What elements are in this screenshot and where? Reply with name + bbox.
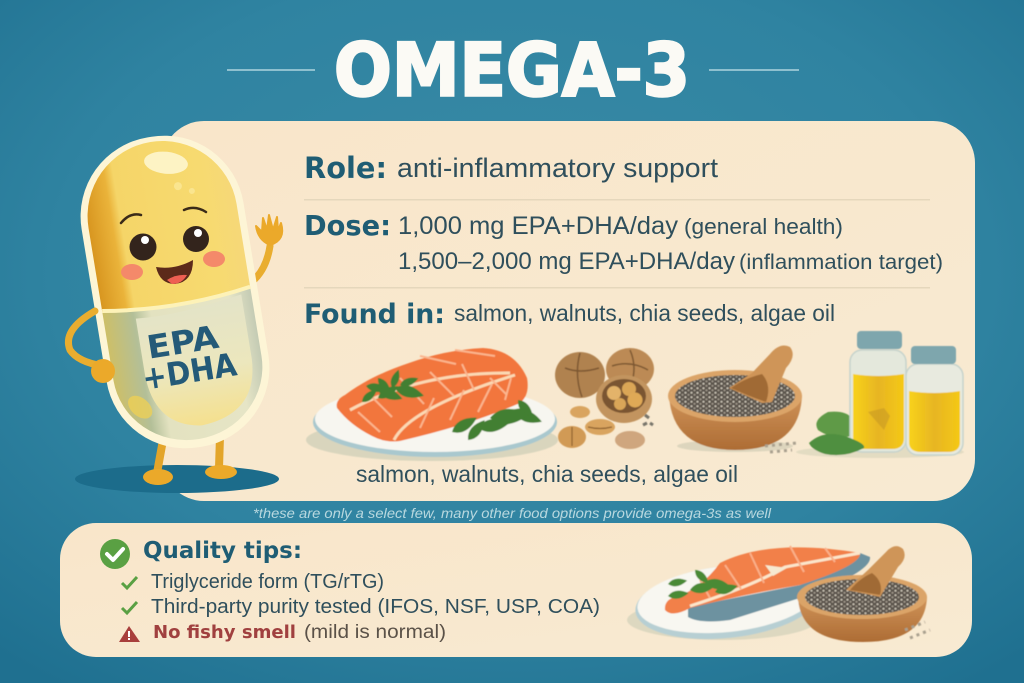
quality tips heading: Quality tips: <box>143 538 302 564</box>
found in row: Found in: <box>304 299 445 330</box>
dose row: (inflammation target) <box>739 251 943 274</box>
icon: chia seed bowl <box>668 346 802 452</box>
food caption: salmon, walnuts, chia seeds, algae oil <box>356 461 738 487</box>
role row: anti-inflammatory support <box>397 153 719 183</box>
icon: salmon on plate <box>306 348 558 461</box>
footnote: *these are only a select few, many other food options provide omega-3s as well <box>253 505 772 521</box>
tip: triglyceride form: Triglyceride form (TG/rTG) <box>151 571 384 593</box>
tip: no fishy smell: (mild is normal) <box>304 622 446 643</box>
left arm and pointing hand <box>68 311 115 383</box>
dose row: Dose: <box>304 209 391 242</box>
capsule label <box>135 316 240 398</box>
tip: no fishy smell <box>119 622 446 643</box>
title: OMEGA-3 <box>334 28 690 114</box>
dose row: 1,500–2,000 mg EPA+DHA/day <box>398 248 735 275</box>
tip: third-party tested: Third-party purity tested (IFOS, NSF, USP, COA) <box>151 596 600 618</box>
right arm and waving hand <box>249 215 282 284</box>
icon: green check badge <box>100 539 130 569</box>
mascot: omega-3 capsule <box>68 124 282 493</box>
capsule label: +DHA <box>140 345 240 398</box>
role row: Role: <box>304 151 387 185</box>
role row <box>304 151 719 185</box>
dose row: (general health) <box>684 214 843 239</box>
found in row <box>304 299 835 330</box>
found in row: salmon, walnuts, chia seeds, algae oil <box>454 300 835 326</box>
icon: salmon steak and chia bowl <box>627 546 930 647</box>
capsule label: EPA <box>144 318 222 367</box>
ground shadow <box>75 465 279 493</box>
capsule body <box>69 124 281 460</box>
icon: algae oil bottles <box>796 331 964 458</box>
tip: no fishy smell: No fishy smell <box>153 622 296 643</box>
panel: quality tips <box>60 523 972 657</box>
dose row <box>304 209 943 275</box>
icon: walnuts <box>555 348 654 449</box>
face <box>121 208 225 284</box>
dose row: 1,000 mg EPA+DHA/day <box>398 212 678 240</box>
panel: main information <box>162 121 975 501</box>
legs and feet <box>143 436 237 485</box>
